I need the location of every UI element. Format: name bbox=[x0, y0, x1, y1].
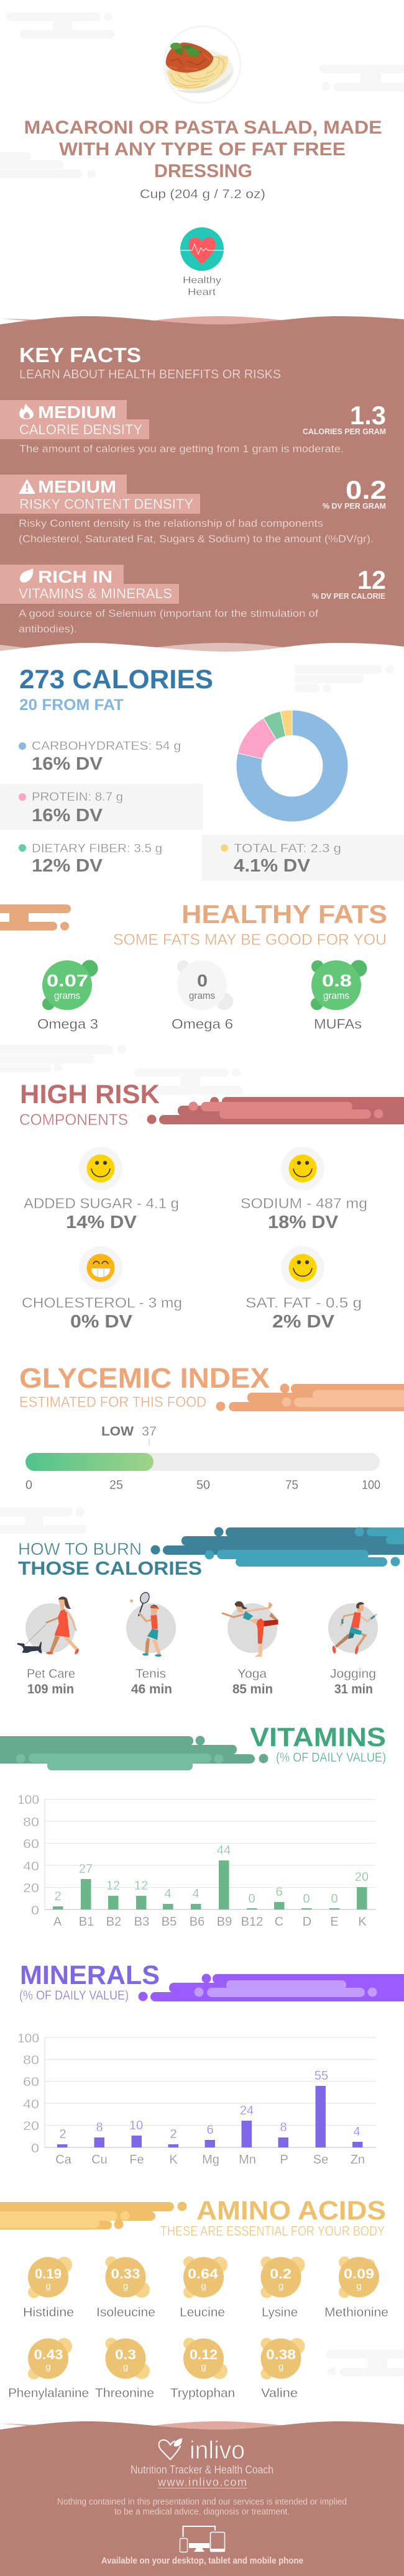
panel: minerals bbox=[17, 1960, 404, 2167]
legend: dietary fiber: 12% DV bbox=[32, 856, 103, 876]
decorative banner bbox=[0, 1736, 269, 1770]
amino: tryptophan: Tryptophan bbox=[170, 2387, 235, 2400]
decorative banner bbox=[0, 904, 71, 931]
background cloud bbox=[294, 665, 394, 693]
x axis labels: K bbox=[169, 2153, 178, 2167]
fact: calorie density: CALORIE DENSITY bbox=[19, 422, 142, 437]
header section bbox=[0, 12, 404, 298]
background cloud bbox=[326, 2350, 404, 2377]
amino: histidine: Histidine bbox=[23, 2306, 74, 2319]
amino: leucine: g bbox=[201, 2281, 206, 2292]
fact: risky content density: 0.2 bbox=[346, 475, 387, 504]
item: added sugar: 14% DV bbox=[66, 1213, 137, 1232]
bar chart: minerals bbox=[17, 2032, 376, 2167]
panel: footer bbox=[0, 2421, 404, 2576]
bubble: omega 6: 0 bbox=[197, 971, 208, 990]
y axis labels: 20 bbox=[23, 1882, 39, 1895]
fact: risky content density: MEDIUM bbox=[38, 477, 116, 496]
icon: leaf bbox=[20, 568, 33, 583]
subheading: (% OF DAILY VALUE) bbox=[276, 1750, 386, 1765]
bubble: mufas: MUFAs bbox=[314, 1016, 362, 1032]
background cloud: top left bbox=[6, 12, 114, 39]
value labels bbox=[54, 1844, 369, 1906]
icon: warning triangle bbox=[19, 479, 35, 494]
bubble: omega 6: grams bbox=[189, 991, 215, 1001]
decorative banner bbox=[138, 1974, 404, 2001]
fact: rich in vitamins and minerals: VITAMINS & MINERALS bbox=[19, 586, 172, 601]
item: cholesterol: 0% DV bbox=[70, 1312, 133, 1332]
food photo: spaghetti plate bbox=[163, 26, 241, 103]
heading: AMINO ACIDS bbox=[196, 2196, 386, 2226]
activity: pet care: Pet Care bbox=[27, 1667, 75, 1681]
amino: methionine bbox=[324, 2256, 388, 2319]
icon: healthy heart bbox=[180, 227, 224, 271]
gauge scale: 75 bbox=[285, 1478, 298, 1492]
y axis labels: 60 bbox=[23, 1837, 39, 1851]
gauge value label: LOW bbox=[101, 1424, 134, 1439]
value labels: 8 bbox=[280, 2121, 287, 2134]
label: healthy heart: Healthy bbox=[183, 275, 221, 286]
availability note: Available on your desktop, tablet and mobile phone bbox=[101, 2556, 303, 2566]
y axis labels: 100 bbox=[17, 2032, 39, 2046]
y axis labels: 100 bbox=[17, 1793, 39, 1807]
subheading: ESTIMATED FOR THIS FOOD bbox=[19, 1394, 206, 1411]
logo mark: heart and leaf bbox=[159, 2438, 182, 2460]
x axis labels: B3 bbox=[134, 1915, 149, 1929]
activity: pet care: 109 min bbox=[27, 1682, 74, 1696]
background cloud: right bbox=[319, 65, 404, 91]
amino: leucine: Leucine bbox=[180, 2306, 225, 2319]
bubble: omega 3: grams bbox=[54, 991, 80, 1001]
label: healthy heart bbox=[183, 275, 221, 298]
illustration: runner bbox=[332, 1602, 377, 1655]
donut chart bbox=[236, 710, 348, 822]
y axis labels: 0 bbox=[31, 1904, 39, 1918]
fact: calorie density bbox=[0, 400, 386, 455]
fact: risky content density bbox=[0, 475, 387, 545]
item: sodium: SODIUM - 487 mg bbox=[241, 1195, 367, 1211]
x axis labels: Ca bbox=[55, 2153, 72, 2167]
panel: healthy fats bbox=[0, 899, 387, 1032]
activity: jogging: 31 min bbox=[334, 1682, 373, 1696]
x axis labels: B5 bbox=[162, 1915, 177, 1929]
activity: tennis: Tenis bbox=[135, 1667, 166, 1681]
activity: jogging: Jogging bbox=[330, 1667, 376, 1681]
wave backdrop bbox=[0, 2421, 404, 2576]
fact: rich in vitamins and minerals: antibodies). bbox=[19, 623, 77, 635]
y axis labels: 20 bbox=[23, 2119, 39, 2133]
x axis labels: B9 bbox=[217, 1915, 232, 1929]
fact: rich in vitamins and minerals bbox=[0, 565, 386, 635]
bubble: mufas: grams bbox=[323, 991, 349, 1001]
x axis labels: B6 bbox=[190, 1915, 204, 1929]
item: cholesterol bbox=[22, 1246, 182, 1332]
title: MACARONI OR PASTA SALAD, MADE bbox=[24, 117, 382, 138]
x axis labels: B2 bbox=[106, 1915, 121, 1929]
fact: rich in vitamins and minerals: % DV PER CALORIE bbox=[312, 591, 385, 601]
fact: calorie density: 1.3 bbox=[350, 401, 386, 430]
icon: smiley bbox=[87, 1154, 114, 1183]
decorative banner bbox=[150, 1527, 404, 1567]
gauge scale: 100 bbox=[362, 1478, 380, 1492]
panel: amino acids bbox=[0, 2196, 404, 2400]
amino: isoleucine: Isoleucine bbox=[96, 2306, 155, 2319]
gauge bar bbox=[25, 1453, 380, 1471]
x axis labels: Fe bbox=[129, 2153, 144, 2167]
value labels: 4 bbox=[353, 2125, 360, 2139]
item: added sugar bbox=[24, 1147, 179, 1232]
heading bbox=[18, 1539, 202, 1579]
y axis labels: 80 bbox=[23, 1816, 39, 1829]
amino: phenylalanine: 0.43 bbox=[34, 2347, 63, 2362]
legend: total fat: 4.1% DV bbox=[234, 856, 311, 876]
illustration: tennis player bbox=[130, 1591, 162, 1657]
y axis labels: 0 bbox=[31, 2142, 39, 2155]
panel: key facts bbox=[0, 316, 404, 652]
bubble: omega 6 bbox=[172, 960, 233, 1032]
x axis labels: Mg bbox=[202, 2153, 219, 2167]
legend: protein bbox=[0, 784, 203, 830]
gauge value label: 37 bbox=[142, 1424, 157, 1439]
fact: risky content density: (Cholesterol, Saturated Fat, Sugars & Sodium) to the amount (%DV/gr). bbox=[19, 533, 374, 545]
value labels: 0 bbox=[303, 1892, 310, 1906]
legend: protein: 16% DV bbox=[32, 806, 103, 826]
x axis labels bbox=[53, 1915, 367, 1929]
background cloud: left bbox=[0, 152, 96, 178]
subheading: from fat: 20 FROM FAT bbox=[19, 696, 124, 714]
amino: threonine: 0.3 bbox=[115, 2347, 136, 2362]
x axis labels: Mn bbox=[239, 2153, 256, 2167]
amino: phenylalanine bbox=[8, 2338, 89, 2400]
amino: lysine: 0.2 bbox=[270, 2266, 292, 2282]
activity: tennis bbox=[126, 1591, 176, 1696]
fact: rich in vitamins and minerals: RICH IN bbox=[38, 567, 112, 586]
label: healthy heart: Heart bbox=[188, 287, 216, 298]
value labels: 6 bbox=[275, 1885, 283, 1899]
panel: vitamins bbox=[0, 1723, 386, 1929]
legend: total fat: TOTAL FAT: 2.3 g bbox=[234, 842, 341, 855]
fact: calorie density: CALORIES PER GRAM bbox=[303, 427, 386, 436]
bubble: omega 6: Omega 6 bbox=[172, 1016, 233, 1032]
gauge scale: 50 bbox=[196, 1478, 210, 1492]
value labels: 8 bbox=[96, 2121, 103, 2134]
amino: leucine bbox=[180, 2256, 227, 2319]
wave backdrop bbox=[0, 316, 404, 652]
legend: carbohydrates: CARBOHYDRATES: 54 g bbox=[32, 739, 181, 753]
fact: calorie density: The amount of calories you are getting from 1 gram is moderate. bbox=[19, 443, 344, 455]
amino: methionine: 0.09 bbox=[344, 2266, 374, 2282]
logo wordmark: inlivo bbox=[190, 2436, 245, 2464]
amino: histidine bbox=[23, 2257, 74, 2319]
value labels: 2 bbox=[170, 2128, 177, 2141]
heading: HIGH RISK bbox=[20, 1080, 160, 1109]
legend: dietary fiber: DIETARY FIBER: 3.5 g bbox=[32, 842, 162, 855]
legend: carbohydrates bbox=[19, 739, 181, 774]
panel: calories bbox=[0, 665, 404, 881]
tagline: Nutrition Tracker & Health Coach bbox=[131, 2464, 273, 2476]
y axis labels bbox=[17, 2032, 39, 2155]
amino: methionine: Methionine bbox=[324, 2306, 388, 2319]
title bbox=[24, 117, 382, 181]
value labels: 20 bbox=[355, 1870, 369, 1884]
value labels: 12 bbox=[134, 1879, 148, 1893]
item: sodium: 18% DV bbox=[268, 1213, 339, 1232]
amino: valine: 0.38 bbox=[266, 2347, 296, 2362]
value labels: 44 bbox=[217, 1844, 231, 1857]
value labels: 2 bbox=[59, 2128, 67, 2141]
title: DRESSING bbox=[154, 161, 252, 181]
background cloud bbox=[0, 1508, 86, 1534]
x axis labels: B12 bbox=[241, 1915, 263, 1929]
disclaimer: to be a medical advice, diagnosis or treatment. bbox=[114, 2506, 290, 2517]
amino: histidine: 0.19 bbox=[35, 2266, 62, 2282]
subheading: COMPONENTS bbox=[19, 1111, 128, 1129]
amino: histidine: g bbox=[45, 2281, 51, 2292]
icon: grinning face bbox=[87, 1254, 114, 1282]
fact: risky content density: Risky Content density is the relationship of bad components bbox=[19, 517, 323, 529]
amino: valine bbox=[261, 2338, 305, 2400]
decorative banner bbox=[147, 1097, 404, 1124]
background clouds bbox=[0, 1045, 242, 1095]
item: cholesterol: CHOLESTEROL - 3 mg bbox=[22, 1295, 182, 1311]
x axis labels: P bbox=[280, 2153, 288, 2167]
amino: phenylalanine: g bbox=[45, 2362, 51, 2372]
amino: tryptophan: g bbox=[201, 2362, 206, 2372]
bars bbox=[53, 1860, 367, 1909]
heading: GLYCEMIC INDEX bbox=[19, 1362, 270, 1394]
amino: tryptophan bbox=[170, 2338, 235, 2400]
x axis labels: E bbox=[330, 1915, 339, 1929]
x axis labels: A bbox=[53, 1915, 62, 1929]
amino: valine: g bbox=[278, 2362, 283, 2372]
value labels bbox=[59, 2069, 360, 2141]
legend: protein: PROTEIN: 8.7 g bbox=[32, 790, 123, 804]
fact: risky content density: RISKY CONTENT DENSITY bbox=[19, 496, 193, 512]
amino: threonine bbox=[95, 2338, 154, 2400]
amino: tryptophan: 0.12 bbox=[190, 2347, 218, 2362]
value labels: 55 bbox=[314, 2069, 328, 2083]
fact: risky content density: % DV PER GRAM bbox=[323, 501, 386, 511]
fact: calorie density: MEDIUM bbox=[38, 403, 116, 422]
activity: yoga bbox=[222, 1601, 278, 1696]
x axis labels: C bbox=[275, 1915, 283, 1929]
value labels: 4 bbox=[192, 1887, 200, 1901]
amino: threonine: g bbox=[123, 2362, 128, 2372]
fact: rich in vitamins and minerals: 12 bbox=[357, 565, 386, 594]
amino: leucine: 0.64 bbox=[188, 2266, 219, 2282]
gauge scale: 25 bbox=[109, 1478, 123, 1492]
amino: isoleucine: g bbox=[123, 2281, 128, 2292]
panel: high risk components bbox=[0, 1045, 404, 1332]
value labels: 12 bbox=[106, 1879, 120, 1893]
amino: valine: Valine bbox=[261, 2387, 298, 2400]
value labels: 2 bbox=[54, 1890, 62, 1903]
heading: HEALTHY FATS bbox=[181, 899, 387, 929]
value labels: 27 bbox=[79, 1862, 93, 1876]
serving size: Cup (204 g / 7.2 oz) bbox=[140, 188, 265, 201]
illustration: yoga pose bbox=[222, 1601, 278, 1657]
bubble: omega 3 bbox=[37, 960, 98, 1032]
decorative banner bbox=[216, 1384, 404, 1411]
item: added sugar: ADDED SUGAR - 4.1 g bbox=[24, 1195, 179, 1211]
value labels: 24 bbox=[240, 2104, 254, 2118]
icon: flame bbox=[19, 404, 34, 419]
x axis labels: K bbox=[358, 1915, 367, 1929]
legend: total fat bbox=[202, 835, 404, 881]
website link: www.inlivo.com bbox=[157, 2476, 247, 2488]
heading: MINERALS bbox=[20, 1960, 160, 1990]
amino: methionine: g bbox=[356, 2281, 362, 2292]
value labels: 10 bbox=[129, 2119, 143, 2132]
illustration: woman walking dog bbox=[17, 1596, 80, 1655]
y axis labels: 40 bbox=[23, 2098, 39, 2111]
x axis labels: Se bbox=[313, 2153, 328, 2167]
gauge value label bbox=[101, 1424, 157, 1445]
gauge scale bbox=[25, 1478, 380, 1492]
icon: devices bbox=[180, 2526, 225, 2552]
item: sodium bbox=[241, 1147, 367, 1232]
subheading: LEARN ABOUT HEALTH BENEFITS OR RISKS bbox=[19, 368, 281, 381]
amino: lysine: Lysine bbox=[262, 2306, 298, 2319]
disclaimer bbox=[57, 2496, 347, 2517]
gauge scale: 0 bbox=[25, 1478, 32, 1492]
icon: smiley bbox=[288, 1154, 317, 1183]
activity: pet care bbox=[17, 1596, 80, 1696]
heading: HOW TO BURN bbox=[18, 1539, 142, 1559]
amino: lysine bbox=[261, 2256, 305, 2319]
value labels: 0 bbox=[331, 1892, 338, 1906]
amino: threonine: Threonine bbox=[95, 2387, 154, 2400]
item: saturated fat: 2% DV bbox=[272, 1312, 335, 1332]
disclaimer: Nothing contained in this presentation and our services is intended or implied bbox=[57, 2496, 347, 2507]
icon: smiley bbox=[288, 1254, 317, 1282]
activity: tennis: 46 min bbox=[131, 1682, 172, 1696]
bubble: mufas: 0.8 bbox=[322, 971, 352, 990]
y axis labels: 40 bbox=[23, 1860, 39, 1873]
legend: dietary fiber bbox=[19, 842, 162, 876]
bubble: omega 3: 0.07 bbox=[47, 971, 88, 990]
item: saturated fat: SAT. FAT - 0.5 g bbox=[246, 1295, 362, 1311]
x axis labels bbox=[55, 2153, 365, 2167]
x axis labels: Cu bbox=[91, 2153, 108, 2167]
heading: VITAMINS bbox=[250, 1723, 386, 1752]
activity: yoga: 85 min bbox=[232, 1682, 273, 1696]
panel: how to burn calories bbox=[0, 1508, 404, 1696]
amino: phenylalanine: Phenylalanine bbox=[8, 2387, 89, 2400]
x axis labels: D bbox=[303, 1915, 311, 1929]
activity: jogging bbox=[328, 1602, 378, 1696]
x axis labels: B1 bbox=[79, 1915, 94, 1929]
subheading: SOME FATS MAY BE GOOD FOR YOU bbox=[113, 931, 387, 949]
bars bbox=[57, 2086, 363, 2147]
x axis labels: Zn bbox=[351, 2153, 365, 2167]
panel: glycemic index bbox=[19, 1362, 404, 1492]
y axis labels: 60 bbox=[23, 2075, 39, 2089]
bar chart: vitamins bbox=[17, 1793, 376, 1929]
bubble: omega 3: Omega 3 bbox=[37, 1016, 98, 1032]
activity: yoga: Yoga bbox=[237, 1667, 267, 1681]
value labels: 6 bbox=[206, 2123, 214, 2137]
item: saturated fat bbox=[246, 1246, 362, 1332]
fact: rich in vitamins and minerals: A good source of Selenium (important for the stimulation of bbox=[19, 608, 318, 619]
legend: carbohydrates: 16% DV bbox=[32, 754, 103, 774]
y axis labels bbox=[17, 1793, 39, 1918]
amino: isoleucine: 0.33 bbox=[111, 2266, 140, 2282]
amino: isoleucine bbox=[96, 2256, 155, 2319]
subheading: (% OF DAILY VALUE) bbox=[19, 1988, 129, 2003]
title: WITH ANY TYPE OF FAT FREE bbox=[59, 139, 346, 160]
value labels: 4 bbox=[164, 1887, 172, 1901]
bubble: mufas bbox=[311, 960, 367, 1032]
heading: THOSE CALORIES bbox=[18, 1557, 202, 1579]
decorative banner bbox=[0, 2201, 186, 2229]
heading: calories: 273 CALORIES bbox=[19, 665, 213, 694]
amino: lysine: g bbox=[278, 2281, 283, 2292]
y axis labels: 80 bbox=[23, 2054, 39, 2067]
heading: key facts: KEY FACTS bbox=[19, 344, 141, 366]
value labels: 0 bbox=[248, 1892, 255, 1906]
